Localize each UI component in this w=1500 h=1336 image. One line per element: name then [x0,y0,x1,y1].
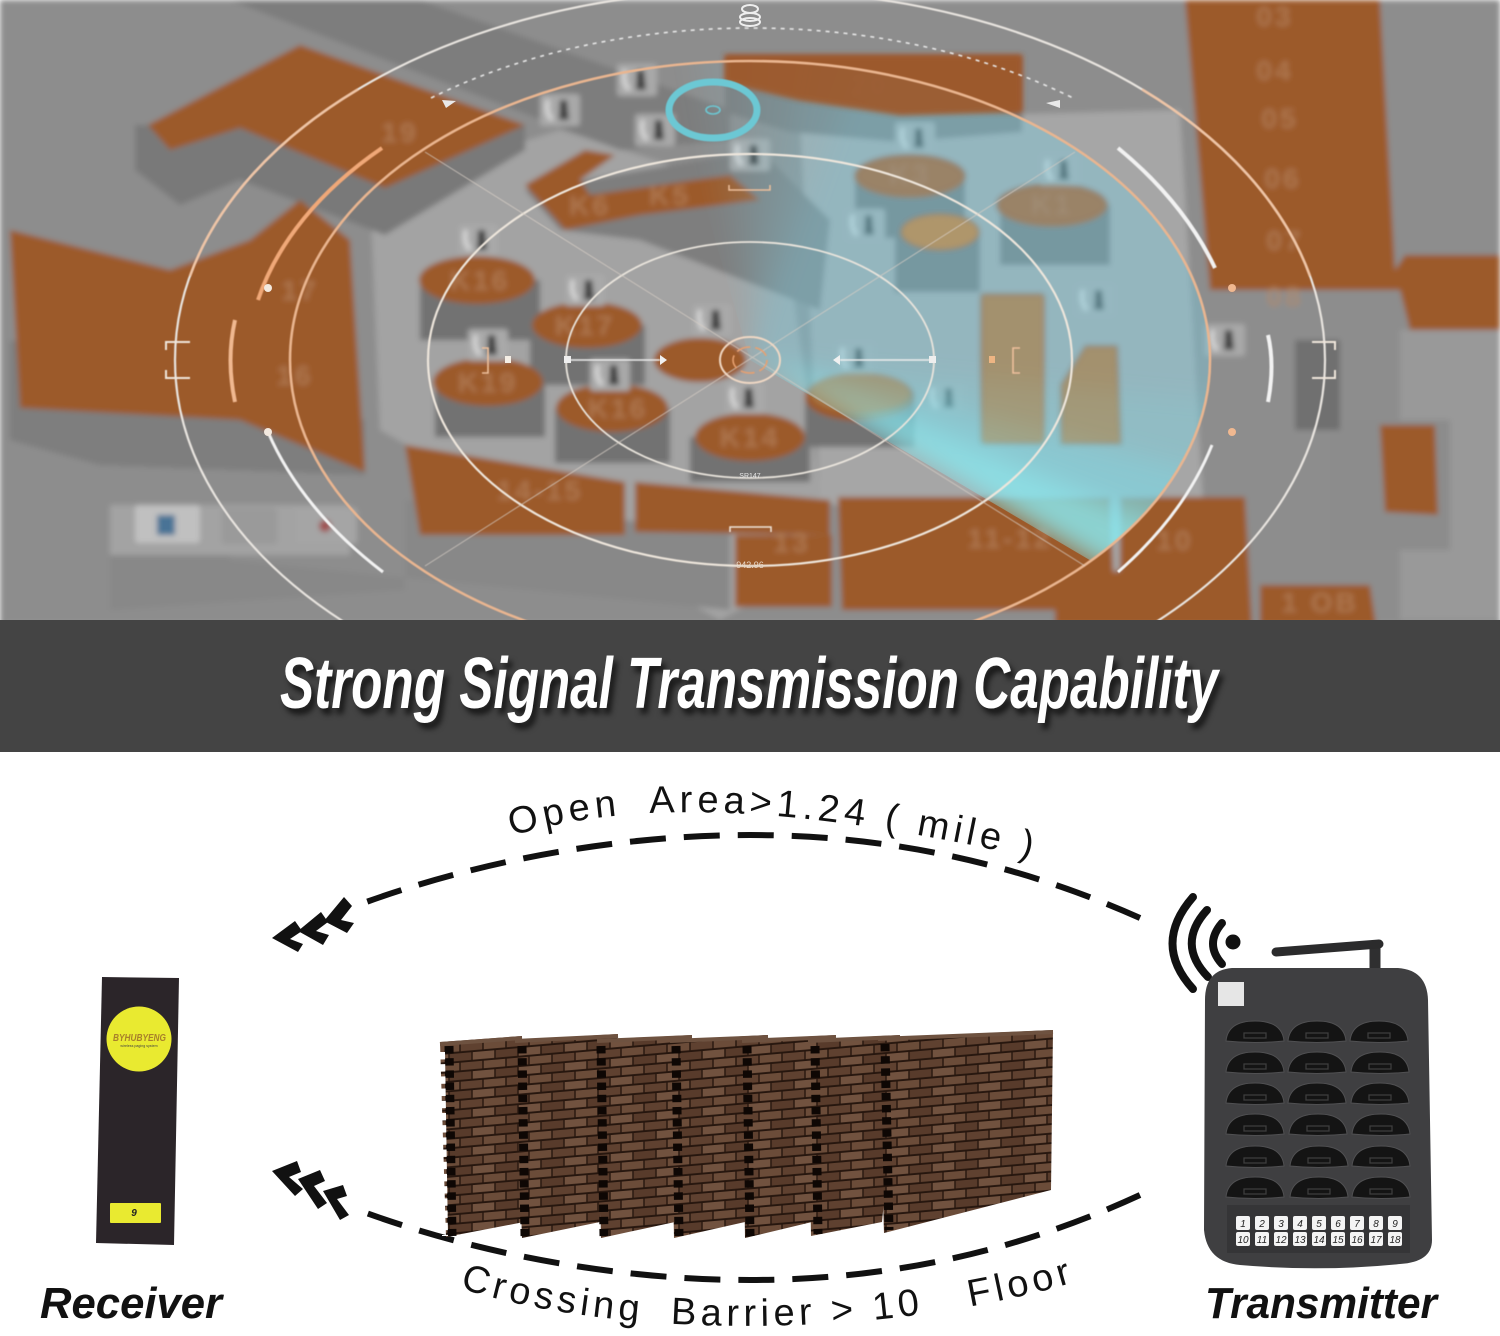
keypad panel: 3 [1278,1219,1284,1230]
blurred map labels: 05 [1261,103,1299,134]
keypad panel: 16 [1351,1235,1363,1246]
keypad panel [1227,1205,1410,1253]
brick walls [440,1030,1053,1238]
blurred map labels: 11-12 [967,523,1053,554]
receiver pager [96,977,179,1245]
top signal path: open area [272,835,1140,952]
blurred map labels: K5 [649,180,691,211]
wall 5 [742,1035,836,1238]
thick arcs [1118,148,1215,268]
arrowheads: bottom [272,1161,349,1220]
blurred map labels: K3 [889,159,931,190]
status window [1218,982,1244,1006]
ring 4: outer [175,0,1325,730]
blurred map labels: 17 [281,275,319,306]
panel: blurred floor-plan map [0,0,1500,625]
receiver number label: 9 [131,1208,137,1219]
wall 3 [597,1035,692,1238]
blurred map labels: 1 OB [1281,587,1359,618]
blurred map labels: K14 [720,422,780,453]
keypad panel: 13 [1294,1235,1306,1246]
horizontal arrows [570,359,660,361]
blurred map labels: K17 [555,310,615,341]
bottom label: barrier crossing: Crossing Barrier > 10 Floor [464,1264,1067,1328]
markers and small HUD labels [264,5,1236,570]
blurred map labels: 06 [1264,163,1302,194]
blurred map labels: 19 [381,117,419,148]
keypad panel: 10 [1237,1235,1249,1246]
cyan radar sweep sector [716,64,1209,560]
markers and small HUD labels: SR147 [739,473,761,480]
blurred map labels: K6 [569,190,611,221]
pager cradles [1226,1021,1410,1198]
keypad panel: 11 [1257,1235,1267,1246]
wall 2 [515,1034,618,1238]
blurred map labels: 08 [1266,281,1304,312]
icon: wireless signal waves [1172,897,1240,989]
ring 1: inner [566,242,934,478]
receiver sticker: brand [106,1006,172,1072]
keypad panel: 12 [1275,1235,1287,1246]
map overlays above sweep: warm blocks [725,55,1120,443]
keypad panel: 14 [1313,1235,1325,1246]
wall 7 [878,1030,1053,1233]
blurred map labels: 16 [276,360,314,391]
keypad panel: 8 [1373,1219,1379,1230]
arrowheads: top [272,897,354,952]
unit cylinders [420,178,1110,482]
receiver sticker: brand: wireless paging system [120,1044,158,1048]
receiver label: Receiver [40,1279,225,1328]
keypad panel: 15 [1332,1235,1344,1246]
orange building blocks [10,0,1500,625]
keypad panel: 4 [1297,1219,1303,1230]
wall 1 [440,1036,524,1237]
wall 6 [808,1035,900,1236]
ring 2: middle [428,154,1072,566]
keypad panel: 6 [1335,1219,1341,1230]
receiver sticker: brand: BYHUBYENG [113,1033,166,1044]
transmitter device [1204,944,1432,1268]
keypad panel: 1 [1240,1219,1246,1230]
dotted arc: top [431,28,1073,98]
antenna [1276,944,1379,970]
markers and small HUD labels: 942.96 [736,560,764,570]
blurred map labels: K19 [458,367,518,398]
small signs [617,64,657,96]
title band [0,620,1500,752]
blurred map labels: 04 [1256,55,1294,86]
outer ring peach arcs [190,89,358,276]
blurred map labels: K16 [588,393,648,424]
transmitter body [1204,968,1432,1268]
ring 3: orange-white [290,61,1210,659]
bottom signal path: barrier crossing [272,1161,1140,1280]
blurred map labels: K1 [1031,189,1073,220]
keypad panel: 7 [1354,1219,1360,1230]
blurred map labels: 03 [1256,1,1294,32]
receiver number label [110,1203,161,1223]
keypad panel: 5 [1316,1219,1322,1230]
radar HUD rings overlay [166,0,1335,730]
top label: open area distance: Open Area>1.24 ( mile ) [510,786,1032,864]
keypad panel: 18 [1389,1235,1401,1246]
blurred map labels: 14-15 [497,475,583,506]
blurred map labels [276,1,1359,618]
side brackets [166,342,190,378]
blurred map labels: 07 [1266,225,1304,256]
blurred map labels: K16 [450,265,510,296]
transmitter label: Transmitter [1205,1279,1440,1328]
wall 4 [670,1035,768,1238]
centre reticle [720,337,780,383]
blurred map labels: 13 [773,527,811,558]
crosshair lines [425,152,1085,566]
keypad panel: 9 [1392,1219,1398,1230]
blurred map labels: 20 [851,70,889,101]
locator ring: cyan [669,82,757,138]
keypad panel: 2 [1258,1219,1265,1230]
blurred map labels: 10 [1156,525,1194,556]
keypad panel: 17 [1370,1235,1382,1246]
